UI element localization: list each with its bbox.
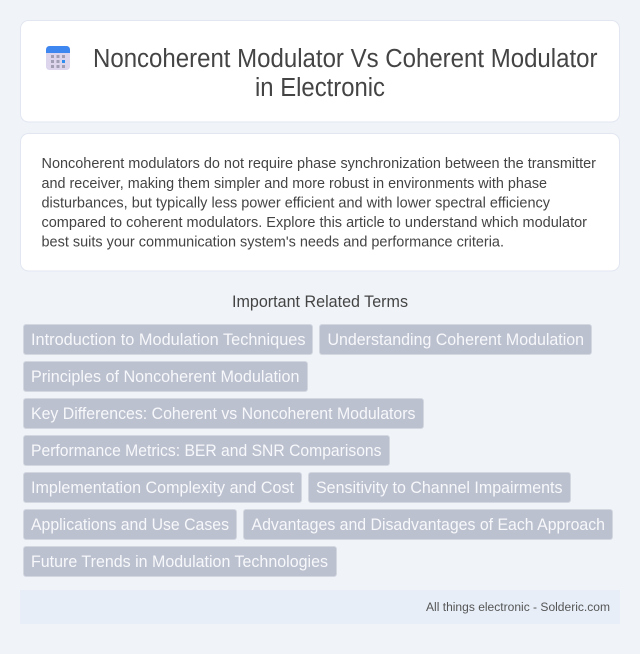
icon: calendar	[46, 46, 70, 70]
tag: future trends	[24, 546, 336, 576]
tag: future trends: Future Trends in Modulation Technologies	[31, 553, 328, 571]
text block: intro: and receiver, making them simpler and more robust in environments with phase	[42, 176, 547, 192]
tag: introduction	[24, 324, 312, 354]
text block: intro: disturbances, but typically less power efficient and with lower spectral efficiency	[42, 196, 551, 212]
footer	[20, 590, 620, 624]
tag: key differences: Key Differences: Coherent vs Noncoherent Modulators	[31, 405, 416, 423]
text block: intro: Noncoherent modulators do not require phase synchronization between the transmitter	[42, 156, 596, 172]
heading: important related terms: Important Related Terms	[232, 293, 408, 311]
panel: title card	[20, 20, 620, 122]
tag: applications: Applications and Use Cases	[31, 516, 229, 534]
tag: principles	[24, 362, 308, 392]
title	[93, 45, 598, 102]
tag: implementation: Implementation Complexity and Cost	[31, 479, 294, 497]
footer: All things electronic - Solderic.com	[426, 600, 610, 614]
tag: implementation	[24, 472, 302, 502]
tag: understanding coherent: Understanding Coherent Modulation	[328, 331, 584, 349]
text block: intro	[42, 156, 596, 250]
tag: introduction: Introduction to Modulation Techniques	[31, 331, 306, 349]
title: in Electronic	[255, 74, 385, 102]
text block: intro: compared to coherent modulators. Explore this article to understand which modulator	[42, 215, 587, 231]
tag: understanding coherent	[320, 324, 592, 354]
tag: applications	[24, 510, 236, 540]
tag: performance metrics	[24, 436, 390, 466]
title: Noncoherent Modulator Vs Coherent Modulator	[93, 45, 598, 73]
tag: sensitivity: Sensitivity to Channel Impairments	[316, 479, 562, 497]
tag: sensitivity	[308, 472, 570, 502]
panel: intro paragraph	[20, 134, 620, 271]
tag: advantages	[244, 510, 612, 540]
text block: intro: best suits your communication system's needs and performance criteria.	[42, 234, 504, 250]
tag: principles: Principles of Noncoherent Modulation	[31, 368, 300, 386]
tag: key differences	[24, 398, 424, 428]
panel: related term tags	[24, 324, 612, 576]
tag: advantages: Advantages and Disadvantages of Each Approach	[252, 516, 605, 534]
tag: performance metrics: Performance Metrics: BER and SNR Comparisons	[31, 442, 382, 460]
